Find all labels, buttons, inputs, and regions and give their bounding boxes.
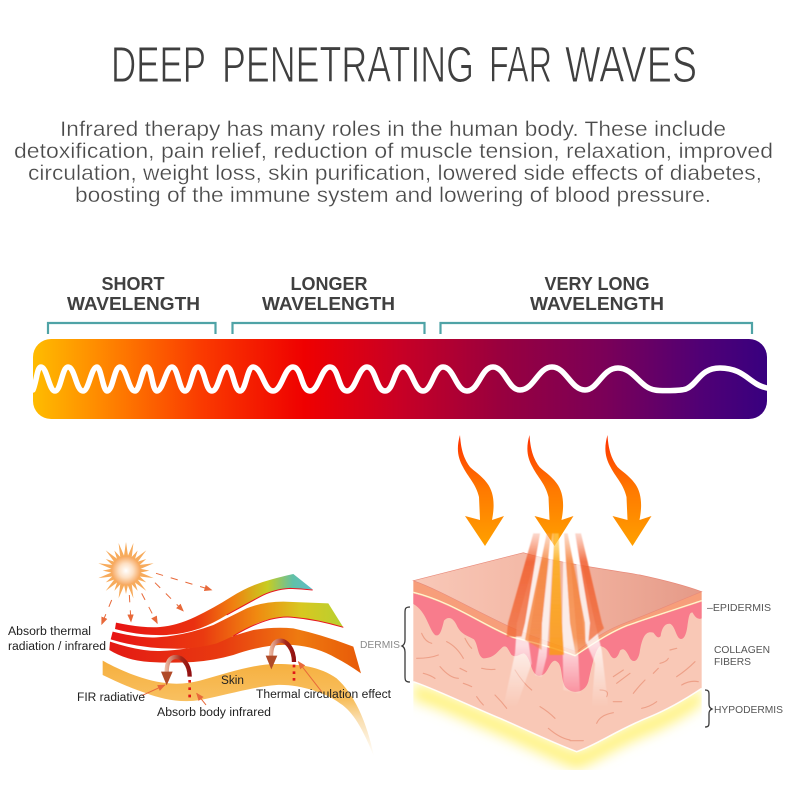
label: longer wavelength [262,274,395,314]
label: hypodermis: HYPODERMIS [714,704,783,716]
intro paragraph: circulation, weight loss, skin purification, lowered side effects of diabetes, [28,162,762,185]
label: collagen fibers: FIBERS [714,656,751,668]
collagen fibers [417,633,698,741]
inner beam left [525,533,551,650]
label: collagen fibers: COLLAGEN [714,644,770,656]
light beams [503,533,608,707]
outer beam right [575,533,604,642]
centre gold beam [549,533,564,655]
label: short wavelength [67,274,200,314]
intro paragraph: Infrared therapy has many roles in the human body. These include [60,118,726,141]
label: collagen fibers [714,644,770,668]
label: skin: Skin [221,675,244,687]
epidermis band [413,581,702,657]
label: longer wavelength: WAVELENGTH [262,294,395,314]
title: FAR [489,36,552,93]
label: very long wavelength: VERY LONG [544,274,650,294]
sun ray dashed arrows [102,573,212,624]
skin surface [413,553,702,652]
title: WAVES [565,36,697,93]
circulation arrow 1 [161,657,190,698]
title [111,36,697,93]
label: very long wavelength: WAVELENGTH [530,294,664,314]
outer beam left [507,533,540,637]
circulation arrow 2 [266,641,294,682]
icon: flame arrow 2 [527,435,574,546]
intro paragraph: boosting of the immune system and lowering of blood pressure. [75,184,711,207]
leader arrows [142,662,322,705]
label: thermal circulation effect: Thermal circulation effect [256,689,392,701]
intro paragraph [14,118,773,207]
label: longer wavelength: LONGER [290,274,368,294]
inner beam right [564,533,586,655]
skin band [103,661,374,757]
epidermis white line [413,592,702,656]
label: epidermis: –EPIDERMIS [707,602,771,614]
icon: flame arrow 3 [605,435,652,546]
intro paragraph: detoxification, pain relief, reduction of muscle tension, relaxation, improved [14,140,773,163]
hypodermis glow [413,683,702,769]
brace: hypodermis [705,690,712,727]
spectrum bar with wave [33,339,767,419]
ribbon 2 [111,602,343,649]
title: DEEP [111,36,206,93]
label: absorb thermal radiation: Absorb thermal [8,626,91,638]
sun [98,542,154,599]
dermis border line [413,682,702,752]
label: very long wavelength [530,274,664,314]
label: absorb thermal radiation [8,626,106,653]
skin cross-section diagram [413,533,702,769]
title: PENETRATING [222,36,474,93]
wave line [33,367,767,391]
ribbon 1 [115,574,313,635]
brackets [48,323,752,334]
dermis [413,593,702,752]
label: short wavelength: WAVELENGTH [67,294,200,314]
white beams [503,533,546,707]
label: FIR radiative: FIR radiative [77,692,145,704]
label: absorb thermal radiation: radiation / infrared [8,641,106,653]
label: short wavelength: SHORT [102,274,165,294]
label: absorb body infrared: Absorb body infrared [157,707,271,719]
brace: dermis [402,607,410,682]
icon: flame arrow 1 [458,435,504,546]
label: dermis: DERMIS [360,639,400,651]
thermal absorption diagram [98,542,374,757]
ribbon 3 [109,628,361,673]
papillary ridges [413,593,702,692]
